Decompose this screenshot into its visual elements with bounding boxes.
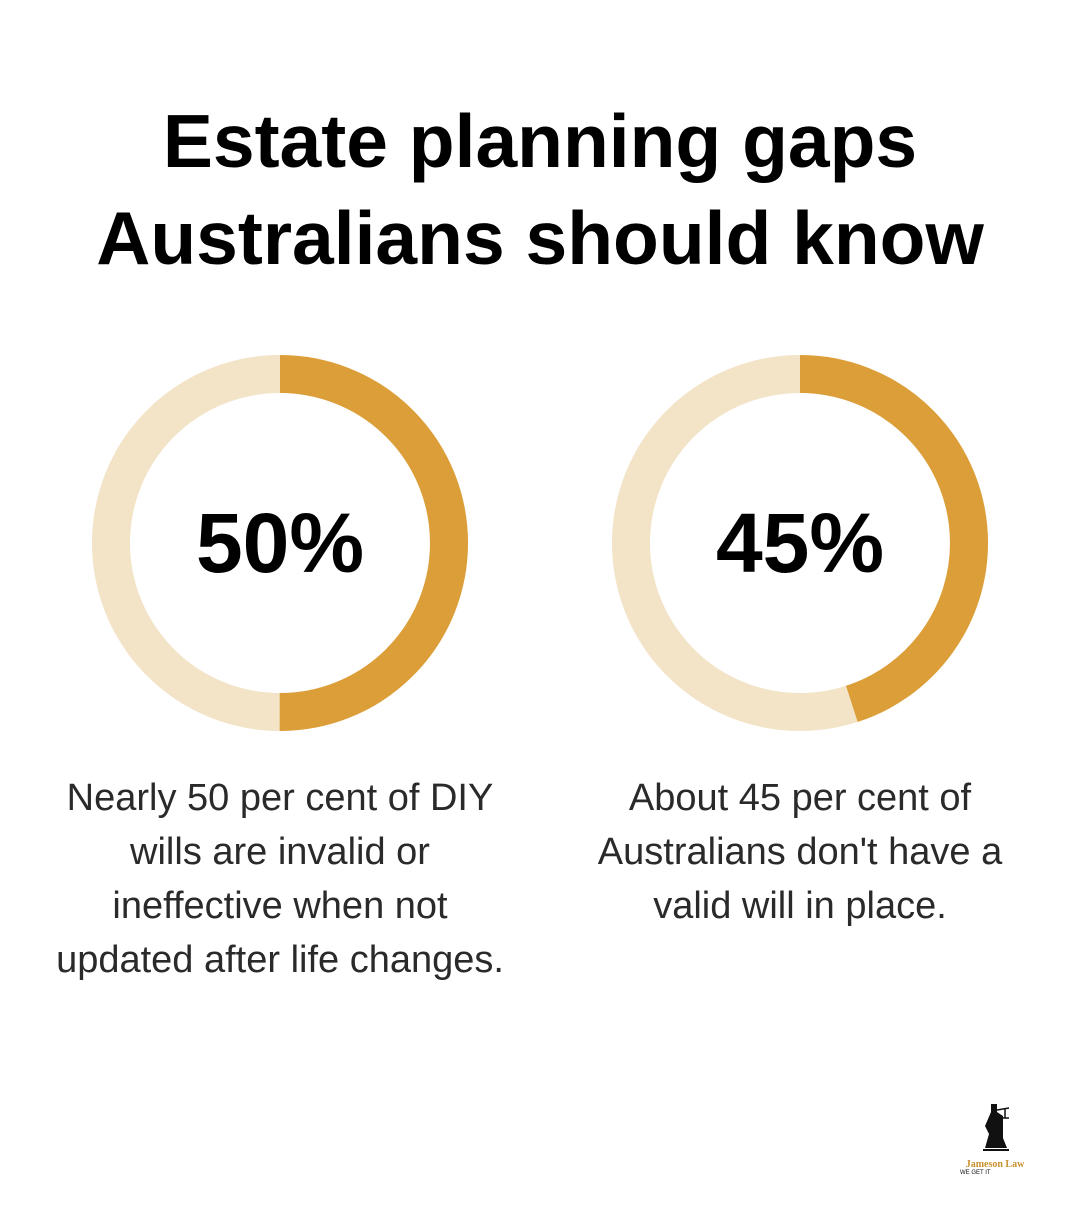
caption: no valid will <box>598 777 1002 927</box>
donut chart: 50% <box>92 355 468 731</box>
donut chart: 45% <box>612 355 988 731</box>
logo: Jameson Law <box>960 1104 1024 1176</box>
title <box>96 99 984 280</box>
caption: no valid will: valid will in place. <box>653 885 947 927</box>
title: Estate planning gaps <box>163 99 917 183</box>
caption: DIY wills <box>56 777 504 981</box>
logo: Jameson Law: Jameson Law <box>966 1159 1024 1170</box>
title: Australians should know <box>96 196 984 280</box>
caption: DIY wills: ineffective when not <box>112 885 448 927</box>
logo: Jameson Law: WE GET IT <box>960 1170 991 1176</box>
caption: DIY wills: updated after life changes. <box>56 939 504 981</box>
caption: DIY wills: Nearly 50 per cent of DIY <box>67 777 493 819</box>
donut chart: 50%: 50% <box>196 496 364 590</box>
donut chart: 45%: 45% <box>716 496 884 590</box>
caption: no valid will: Australians don't have a <box>598 831 1002 873</box>
caption: no valid will: About 45 per cent of <box>629 777 971 819</box>
caption: DIY wills: wills are invalid or <box>130 831 430 873</box>
